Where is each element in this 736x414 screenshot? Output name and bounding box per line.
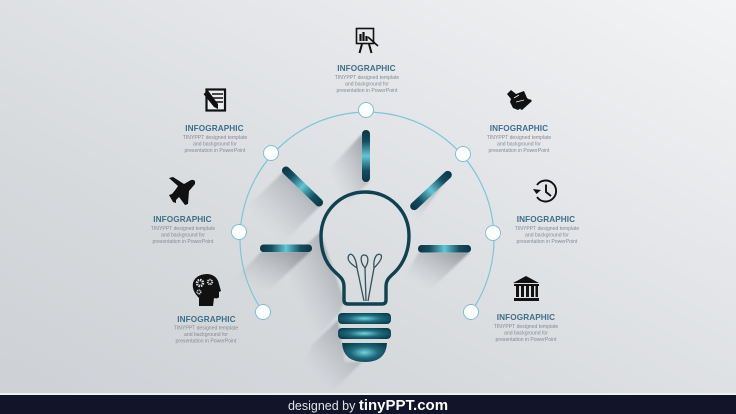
- item: lower right bank: presentation in PowerPoint: [496, 337, 557, 343]
- item: top presentation: and background for: [345, 82, 389, 88]
- base rings: [338, 313, 391, 324]
- item: right history clock: TINYPPT designed template: [515, 226, 579, 232]
- icon: document with pen: [204, 90, 225, 110]
- icon: airplane: [169, 177, 195, 205]
- connector arc: [240, 112, 494, 312]
- item: lower left head: INFOGRAPHIC: [177, 315, 236, 324]
- light bulb: [321, 192, 409, 362]
- item: right history clock: [515, 180, 579, 245]
- item: top presentation: TINYPPT designed template: [335, 75, 399, 81]
- item: upper right handshake: presentation in PowerPoint: [489, 148, 550, 154]
- filament: [348, 254, 382, 301]
- item: upper right handshake: INFOGRAPHIC: [490, 124, 548, 133]
- light rays: [260, 130, 471, 252]
- bulb outline: [321, 192, 409, 304]
- item: left plane: INFOGRAPHIC: [153, 215, 212, 224]
- item: right history clock: INFOGRAPHIC: [517, 215, 575, 224]
- item: lower left head: and background for: [184, 332, 228, 338]
- item: top presentation: [335, 28, 399, 94]
- item: lower left head: presentation in PowerPoint: [176, 338, 237, 344]
- item: upper left document: INFOGRAPHIC: [185, 124, 244, 133]
- item: left plane: TINYPPT designed template: [151, 226, 215, 232]
- item: left plane: presentation in PowerPoint: [153, 239, 214, 245]
- item: left plane: [151, 177, 215, 245]
- long shadows: [220, 134, 470, 394]
- item: lower left head: [174, 274, 238, 344]
- icon: handshake: [507, 90, 532, 110]
- item: upper right handshake: and background for: [497, 142, 541, 148]
- item: lower right bank: and background for: [504, 330, 548, 336]
- item: lower right bank: TINYPPT designed template: [494, 324, 558, 330]
- item: right history clock: and background for: [525, 232, 569, 238]
- icon: presentation board: [356, 28, 378, 53]
- item: upper right handshake: [487, 90, 551, 154]
- icon: head with gears: [193, 274, 221, 306]
- item: upper left document: [183, 90, 247, 154]
- timeline nodes: [232, 102, 500, 320]
- item: lower right bank: INFOGRAPHIC: [497, 313, 555, 322]
- item: top presentation: INFOGRAPHIC: [337, 64, 396, 73]
- item: upper left document: and background for: [193, 142, 237, 148]
- item: left plane: and background for: [161, 232, 205, 238]
- icon: bank building: [513, 276, 539, 301]
- item: top presentation: presentation in PowerPoint: [337, 88, 398, 94]
- item: upper left document: TINYPPT designed template: [183, 135, 247, 141]
- item: lower left head: TINYPPT designed template: [174, 326, 238, 332]
- footer credit: designed by tinyPPT.com: [288, 397, 448, 414]
- icon: clock with arrow: [533, 180, 556, 201]
- item: upper left document: presentation in PowerPoint: [185, 148, 246, 154]
- footer bar: [0, 393, 736, 414]
- item: upper right handshake: TINYPPT designed template: [487, 135, 551, 141]
- item: right history clock: presentation in PowerPoint: [517, 239, 578, 245]
- item: lower right bank: [494, 276, 558, 343]
